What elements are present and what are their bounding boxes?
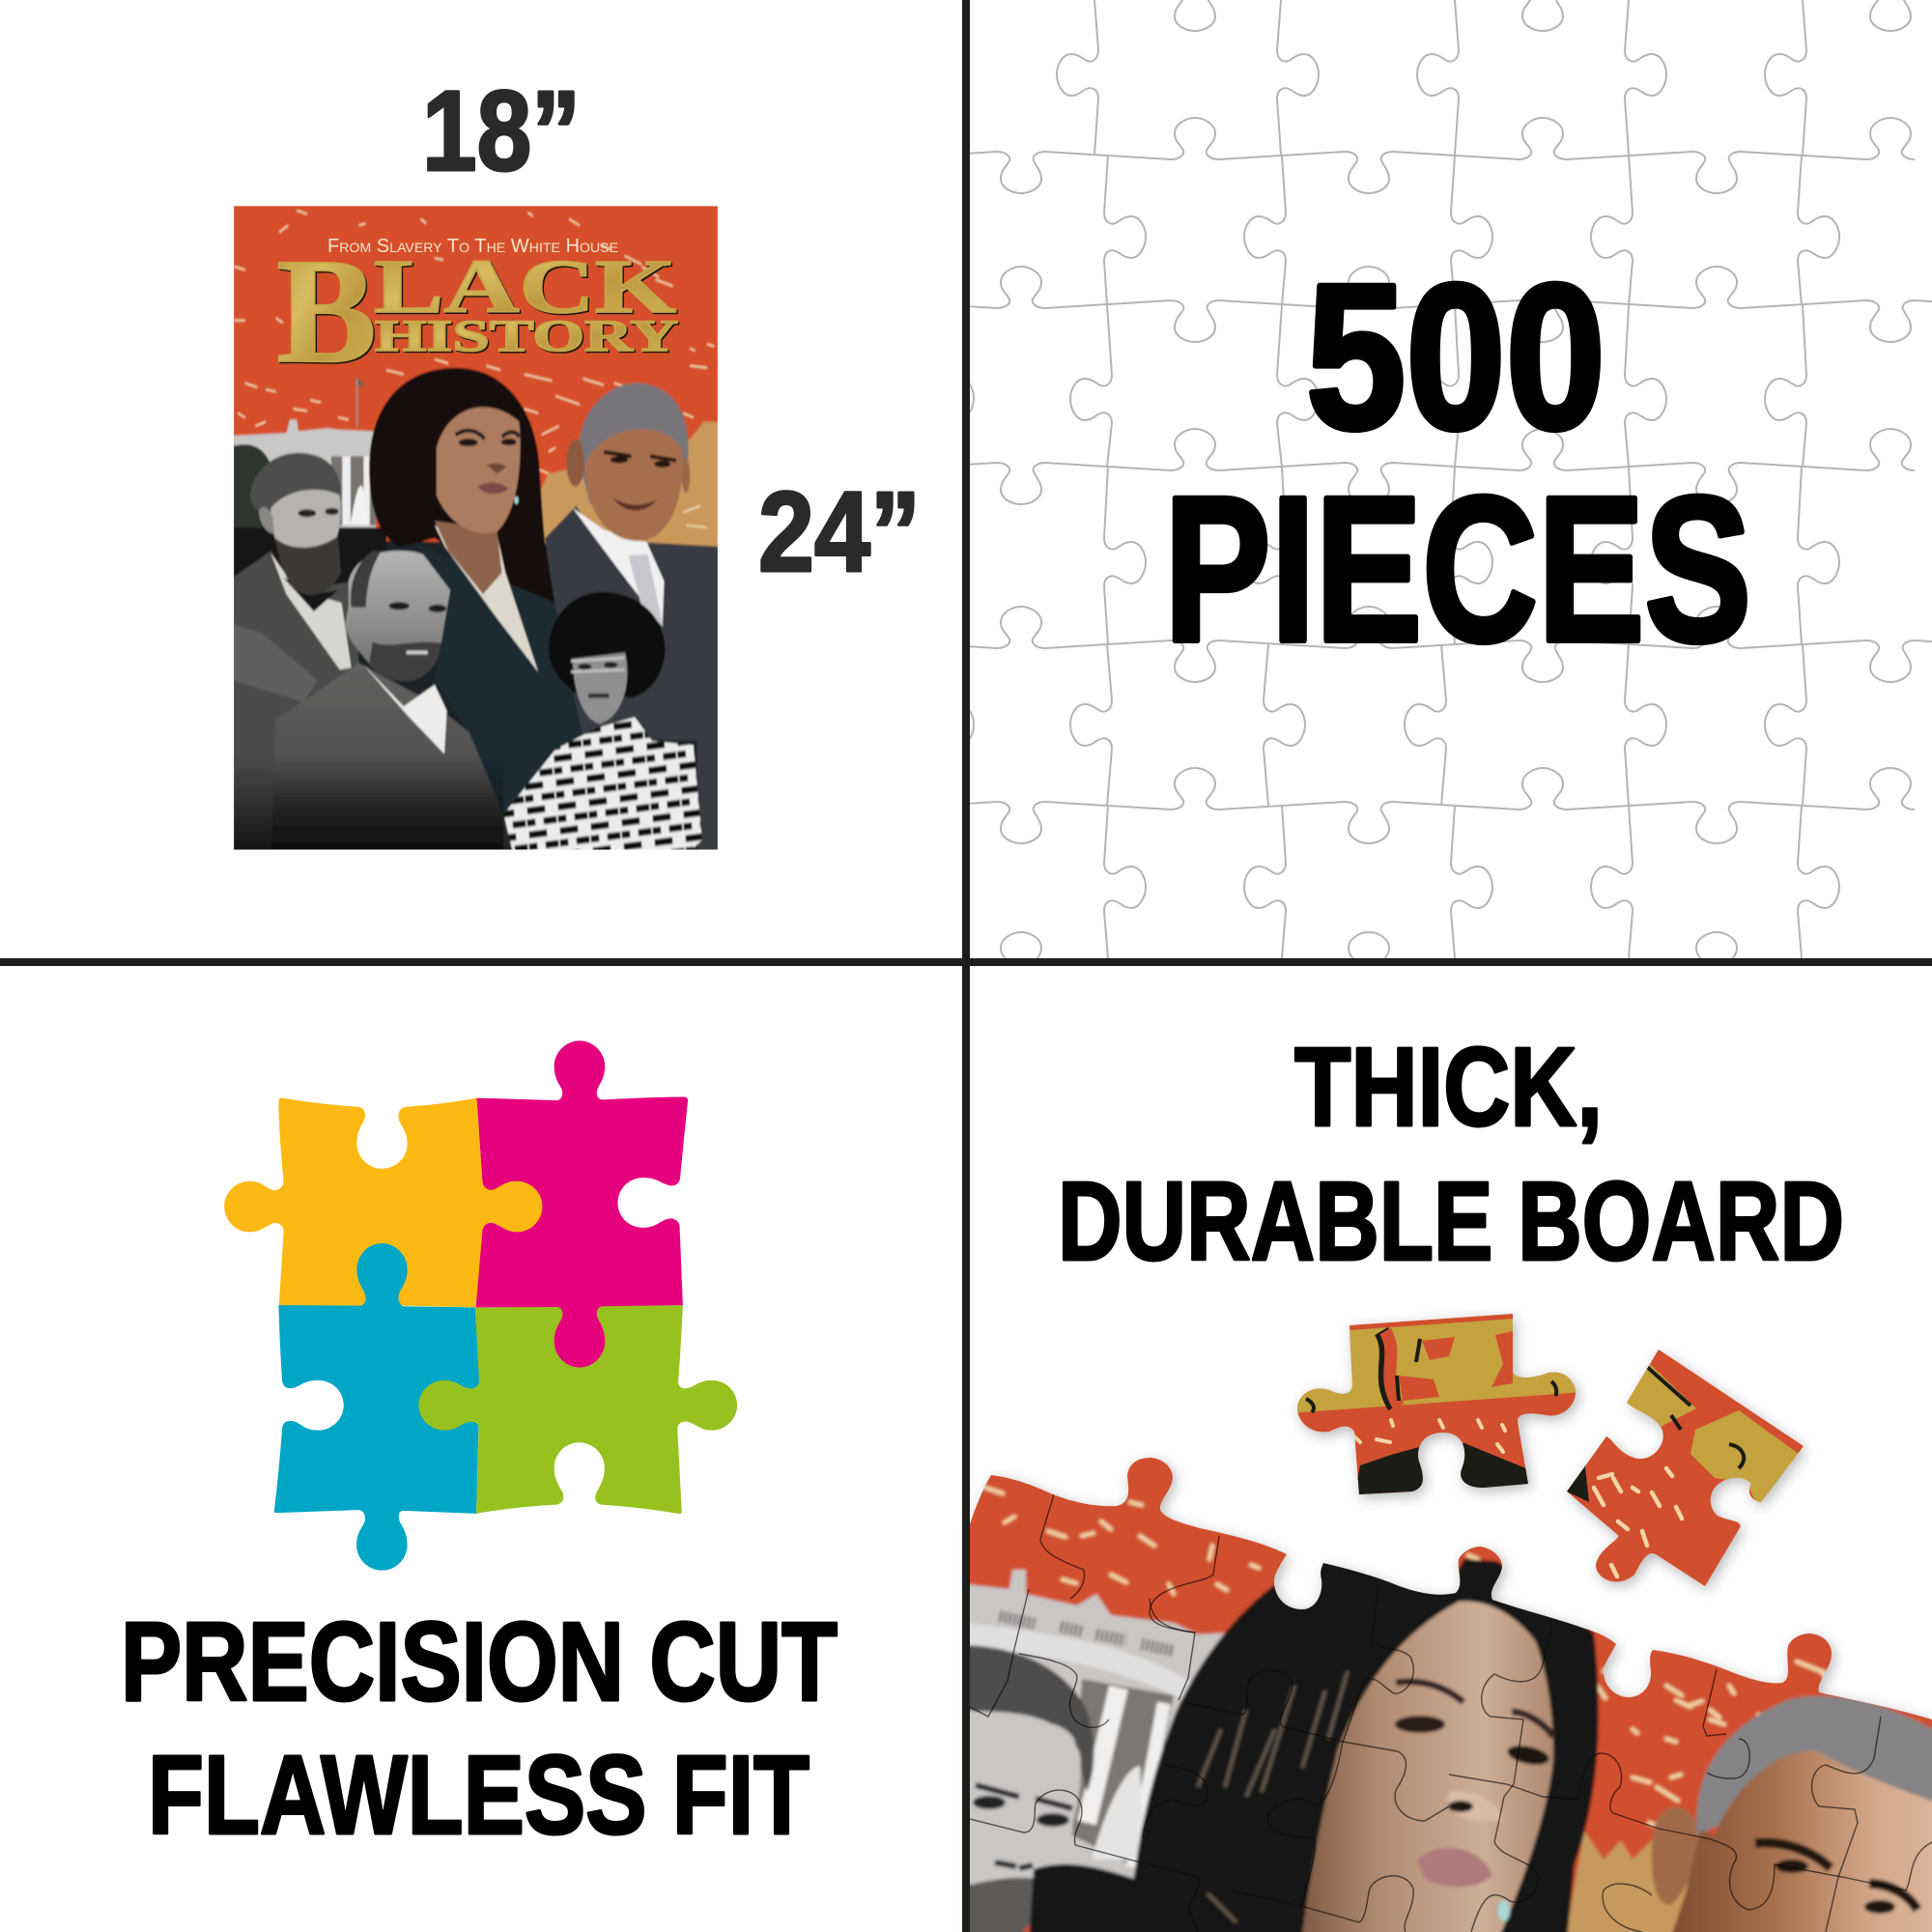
height label 24 inches: 24” — [758, 469, 921, 596]
Barack Obama — [545, 506, 724, 858]
jigsaw line pattern — [970, 0, 1932, 958]
Kamala Harris hair — [1127, 1555, 1599, 1932]
white house — [234, 419, 376, 527]
panel: durable board — [966, 1024, 1932, 1932]
poster title BLACK HISTORY: LACK — [374, 245, 676, 329]
left man — [228, 552, 358, 858]
assembled puzzle photo — [966, 1439, 1932, 1932]
poster title BLACK HISTORY — [276, 227, 678, 394]
heading PRECISION CUT: PRECISION CUT — [121, 1599, 838, 1724]
puzzle cut lines — [970, 1492, 1932, 1932]
panel: dimensions — [228, 68, 921, 858]
poster title BLACK HISTORY: HISTORY — [375, 311, 678, 361]
left man face — [970, 1643, 1137, 1932]
poster collage illustration — [228, 197, 724, 858]
loose puzzle piece with IS letters — [1285, 1304, 1594, 1507]
dark underlay — [357, 539, 698, 850]
Du Bois — [270, 664, 518, 858]
heading FLAWLESS FIT: FLAWLESS FIT — [148, 1732, 810, 1858]
heading THICK: THICK, — [1294, 1024, 1603, 1150]
panel: precision cut — [121, 1040, 838, 1858]
panel: 500 pieces — [970, 0, 1932, 958]
poster artwork — [228, 197, 724, 858]
poster subtitle: From Slavery To The White House — [327, 236, 618, 257]
width label 18 inches: 18” — [422, 68, 581, 195]
white house — [970, 1567, 1227, 1882]
Barack Obama head — [1652, 1695, 1932, 1932]
Kamala Harris — [414, 543, 583, 814]
loose puzzle piece with TO letters — [1566, 1350, 1810, 1594]
tan lower background — [1565, 1830, 1690, 1932]
heading 500: 500 — [1306, 242, 1605, 472]
Kamala Harris face — [1301, 1602, 1553, 1932]
icon: four interlocking puzzle pieces — [224, 1040, 737, 1571]
heading PIECES: PIECES — [1164, 454, 1751, 685]
poster title BLACK HISTORY: B — [276, 227, 377, 394]
Shirley Chisholm — [503, 717, 702, 858]
